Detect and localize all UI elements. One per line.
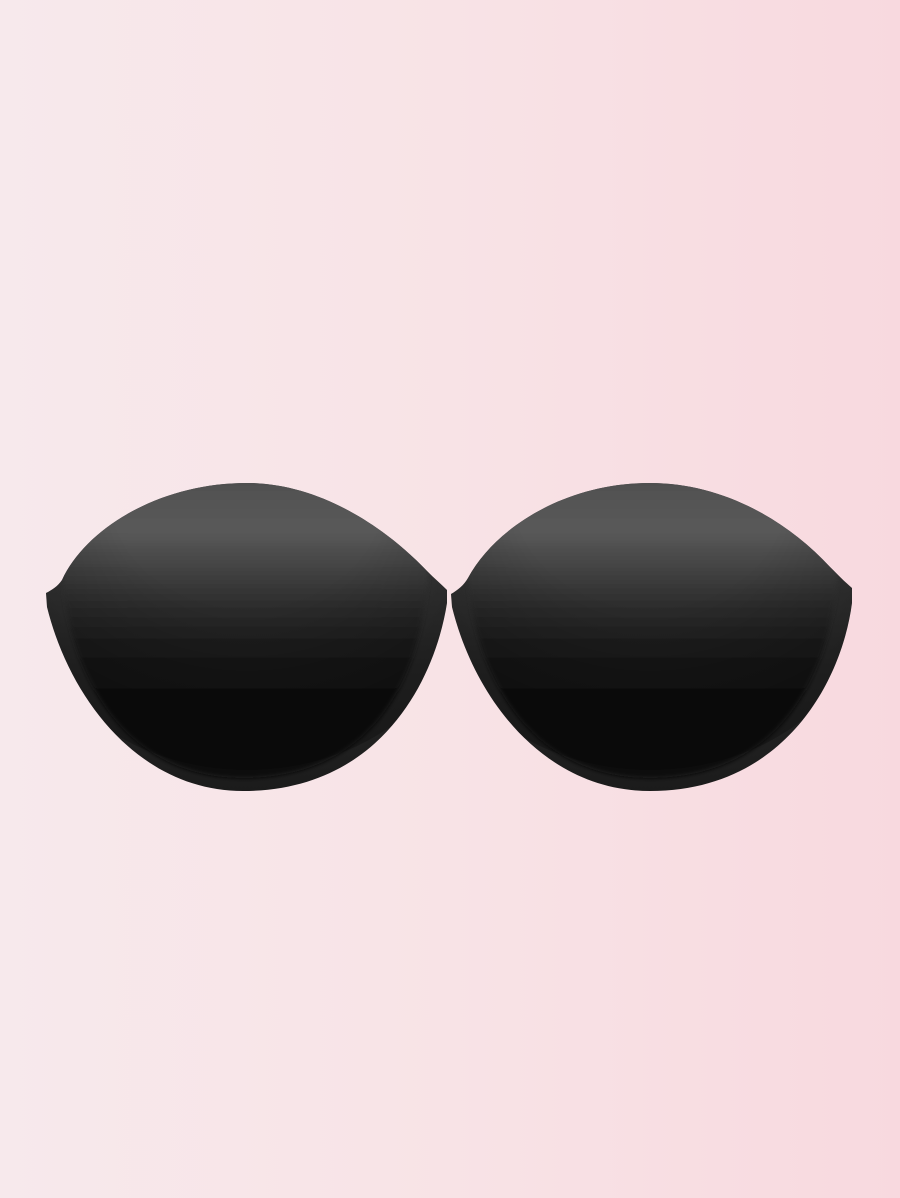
icon: right cup <box>451 483 852 791</box>
icon: left cup <box>46 483 447 791</box>
product illustration: pair of black foam cups <box>46 483 852 791</box>
